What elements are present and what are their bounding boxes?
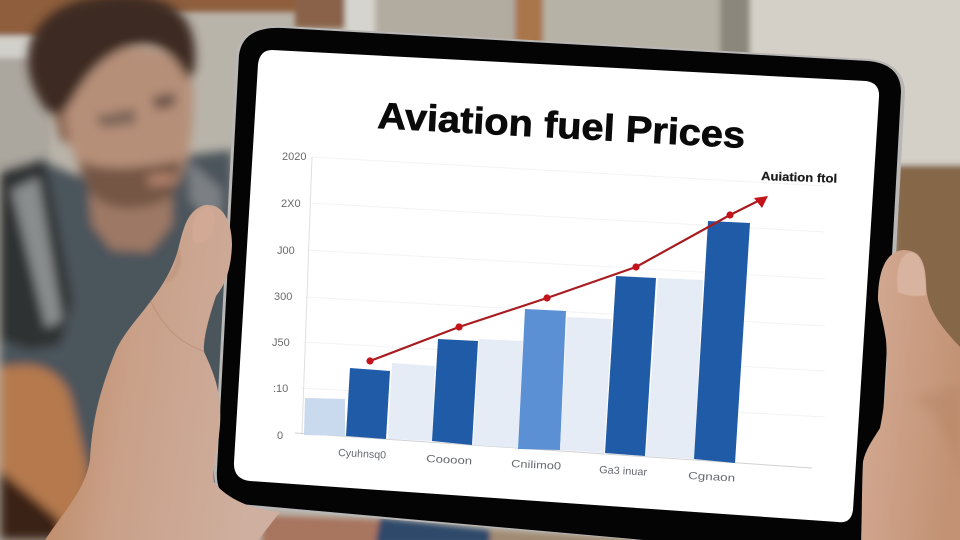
tablet black bezel (217, 28, 901, 540)
blurred lap and far hand at the bottom (262, 515, 720, 540)
left hand holding tablet (40, 205, 280, 540)
right fingernail (897, 252, 926, 296)
x axis labels (338, 447, 736, 484)
left thumbnail (193, 207, 215, 243)
chart gridlines and axes (295, 157, 825, 468)
tablet screen (234, 50, 879, 522)
x axis labels: Cyuhnsq0 (338, 447, 387, 462)
y axis labels: J50 (272, 337, 290, 349)
y axis labels: :10 (273, 383, 288, 395)
x axis labels: Ga3 inuar (599, 464, 648, 479)
y axis labels: 2020 (282, 151, 306, 163)
tablet metal rim (214, 26, 905, 540)
right hand holding tablet (861, 250, 960, 540)
red trend line with arrow (366, 196, 768, 365)
bars (304, 221, 750, 463)
y axis labels: J00 (277, 245, 295, 257)
y axis labels: 300 (274, 291, 292, 303)
x axis labels: Cgnaon (688, 470, 736, 484)
tablet (214, 26, 905, 540)
title: Aviation fuel Prices (377, 95, 746, 156)
bar chart (272, 151, 837, 484)
y axis labels (272, 151, 306, 442)
x axis labels: Cnilimo0 (511, 458, 562, 473)
y axis labels: 0 (277, 430, 283, 442)
x axis labels: Coooon (426, 453, 473, 467)
blurred man in background (0, 0, 250, 540)
y axis labels: 2X0 (281, 198, 301, 210)
series label: Auiation ftol (761, 169, 837, 186)
